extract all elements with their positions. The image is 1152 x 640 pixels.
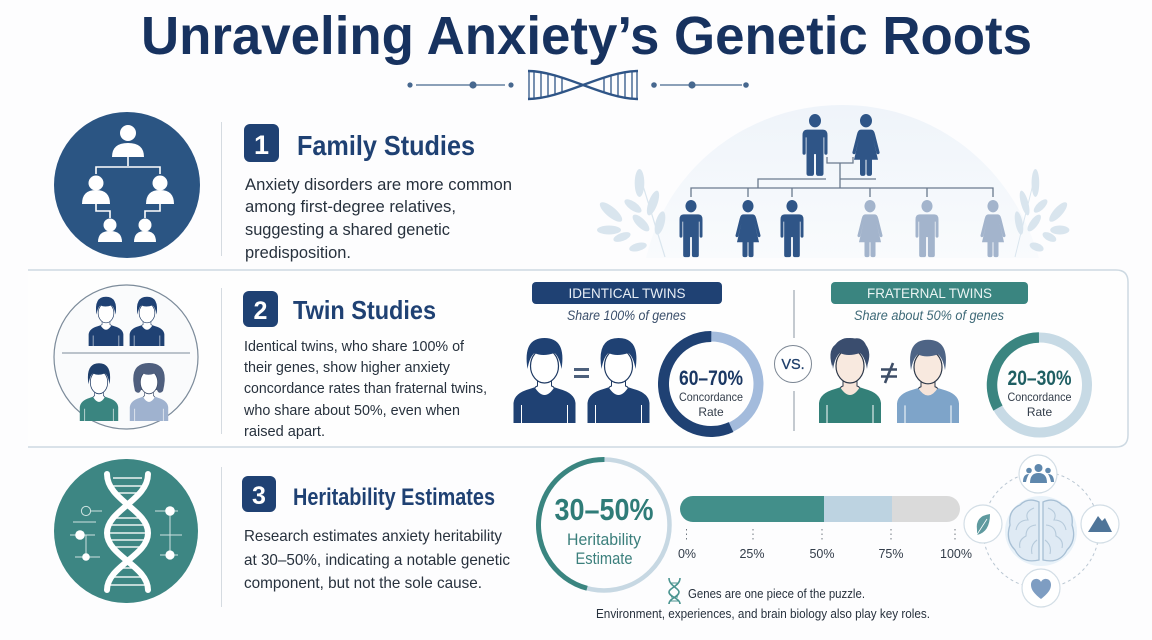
twin figure two (588, 338, 650, 423)
section 1 icon: family tree circle (54, 112, 200, 258)
note text: Environment, experiences, and brain biology also play key roles. (596, 607, 930, 621)
section 2 icon: twins circle (54, 285, 198, 429)
bar axis labels: 25% (739, 547, 765, 561)
affected children (680, 200, 804, 257)
section 1 heading: Family Studies (297, 130, 475, 161)
heritability progress bar (678, 496, 972, 561)
identical twins column (514, 282, 774, 447)
fraternal twins label: FRATERNAL TWINS (867, 285, 992, 301)
section 1 text: predisposition. (245, 243, 351, 262)
contributing factors diagram (964, 455, 1119, 607)
fraternal figure two (897, 340, 959, 423)
icon: mountain (1081, 505, 1119, 543)
pedigree connectors (691, 157, 993, 197)
backdrop dome (646, 105, 1039, 258)
section 3 badge: 3 (252, 482, 266, 510)
section 3 text: Research estimates anxiety heritability (244, 528, 502, 545)
title: Unraveling Anxiety’s Genetic Roots (141, 6, 1032, 66)
column divider (793, 290, 795, 431)
identical concordance ring: Rate (698, 405, 724, 419)
section 2 divider (221, 288, 222, 434)
identical concordance ring (648, 321, 774, 447)
identical twins subtitle: Share 100% of genes (567, 308, 686, 323)
section 3 text: component, but not the sole cause. (244, 575, 482, 592)
section 3 badge (242, 476, 276, 512)
section 2 badge (243, 291, 278, 327)
section 1 badge (244, 124, 279, 162)
identical concordance ring: Concordance (679, 390, 743, 404)
versus badge: VS. (781, 357, 805, 373)
section 3 text (244, 528, 510, 592)
right plant (1013, 169, 1069, 257)
section 2 text: who share about 50%, even when (243, 402, 460, 419)
heritability ring: Heritability (567, 530, 641, 549)
section 2 text: concordance rates than fraternal twins, (244, 380, 487, 397)
note text: Genes are one piece of the puzzle. (688, 587, 865, 601)
section 2 text (243, 338, 487, 440)
fraternal twins label (831, 282, 1028, 304)
section 1 text: Anxiety disorders are more common (245, 175, 512, 194)
family pedigree illustration (597, 105, 1069, 258)
bar axis labels: 50% (809, 547, 835, 561)
left plant (597, 169, 667, 257)
bar axis labels: 75% (878, 547, 904, 561)
fraternal concordance ring: Concordance (1008, 390, 1072, 404)
brain (1005, 496, 1077, 566)
section 1 text (245, 175, 512, 262)
identical twins label (532, 282, 722, 304)
section 2 panel outline (28, 270, 1128, 447)
fraternal twins subtitle: Share about 50% of genes (854, 308, 1004, 323)
unaffected children (858, 200, 1005, 257)
note: DNA icon (669, 578, 680, 604)
section 2 badge: 2 (254, 297, 267, 325)
fraternal concordance ring (975, 320, 1104, 450)
title ornament: DNA with dotted lines (407, 71, 749, 99)
icon: leaf (964, 505, 1002, 543)
identical twins label: IDENTICAL TWINS (568, 285, 686, 301)
section 2 heading: Twin Studies (293, 295, 436, 325)
section 2 text: raised apart. (244, 423, 325, 440)
section 3 text: at 30–50%, indicating a notable genetic (244, 552, 510, 569)
bar ticks (686, 529, 955, 542)
fraternal concordance ring: Rate (1027, 405, 1052, 419)
bar axis labels: 100% (940, 547, 972, 561)
section 1 text: among first-degree relatives, (245, 197, 456, 216)
section 3 heading: Heritability Estimates (293, 484, 495, 511)
identical concordance ring: 60–70% (679, 367, 743, 390)
bar axis labels: 0% (678, 547, 696, 561)
fraternal concordance ring: 20–30% (1008, 367, 1072, 390)
section 2 text: their genes, show higher anxiety (244, 359, 450, 376)
section 3 icon: DNA circle (54, 459, 198, 603)
section 2 text: Identical twins, who share 100% of (244, 338, 465, 355)
versus badge (774, 346, 812, 382)
section 1 badge: 1 (254, 130, 269, 160)
fraternal twins column (819, 282, 1104, 450)
heritability ring (524, 445, 684, 605)
dashed ring (983, 472, 1099, 588)
section 1 divider (221, 122, 222, 256)
icon: heart (1022, 569, 1060, 607)
section 1 text: suggesting a shared genetic (245, 220, 450, 239)
twin figure one (514, 338, 576, 423)
heritability ring: Estimate (576, 549, 632, 568)
icon: community (1019, 455, 1057, 493)
note text (596, 587, 930, 621)
not equal sign (881, 363, 897, 383)
section 3 divider (221, 467, 222, 607)
fraternal figure one (819, 338, 881, 423)
bar axis labels (678, 547, 972, 561)
parents (802, 114, 880, 176)
heritability ring: 30–50% (554, 492, 654, 527)
equals sign (574, 370, 589, 376)
